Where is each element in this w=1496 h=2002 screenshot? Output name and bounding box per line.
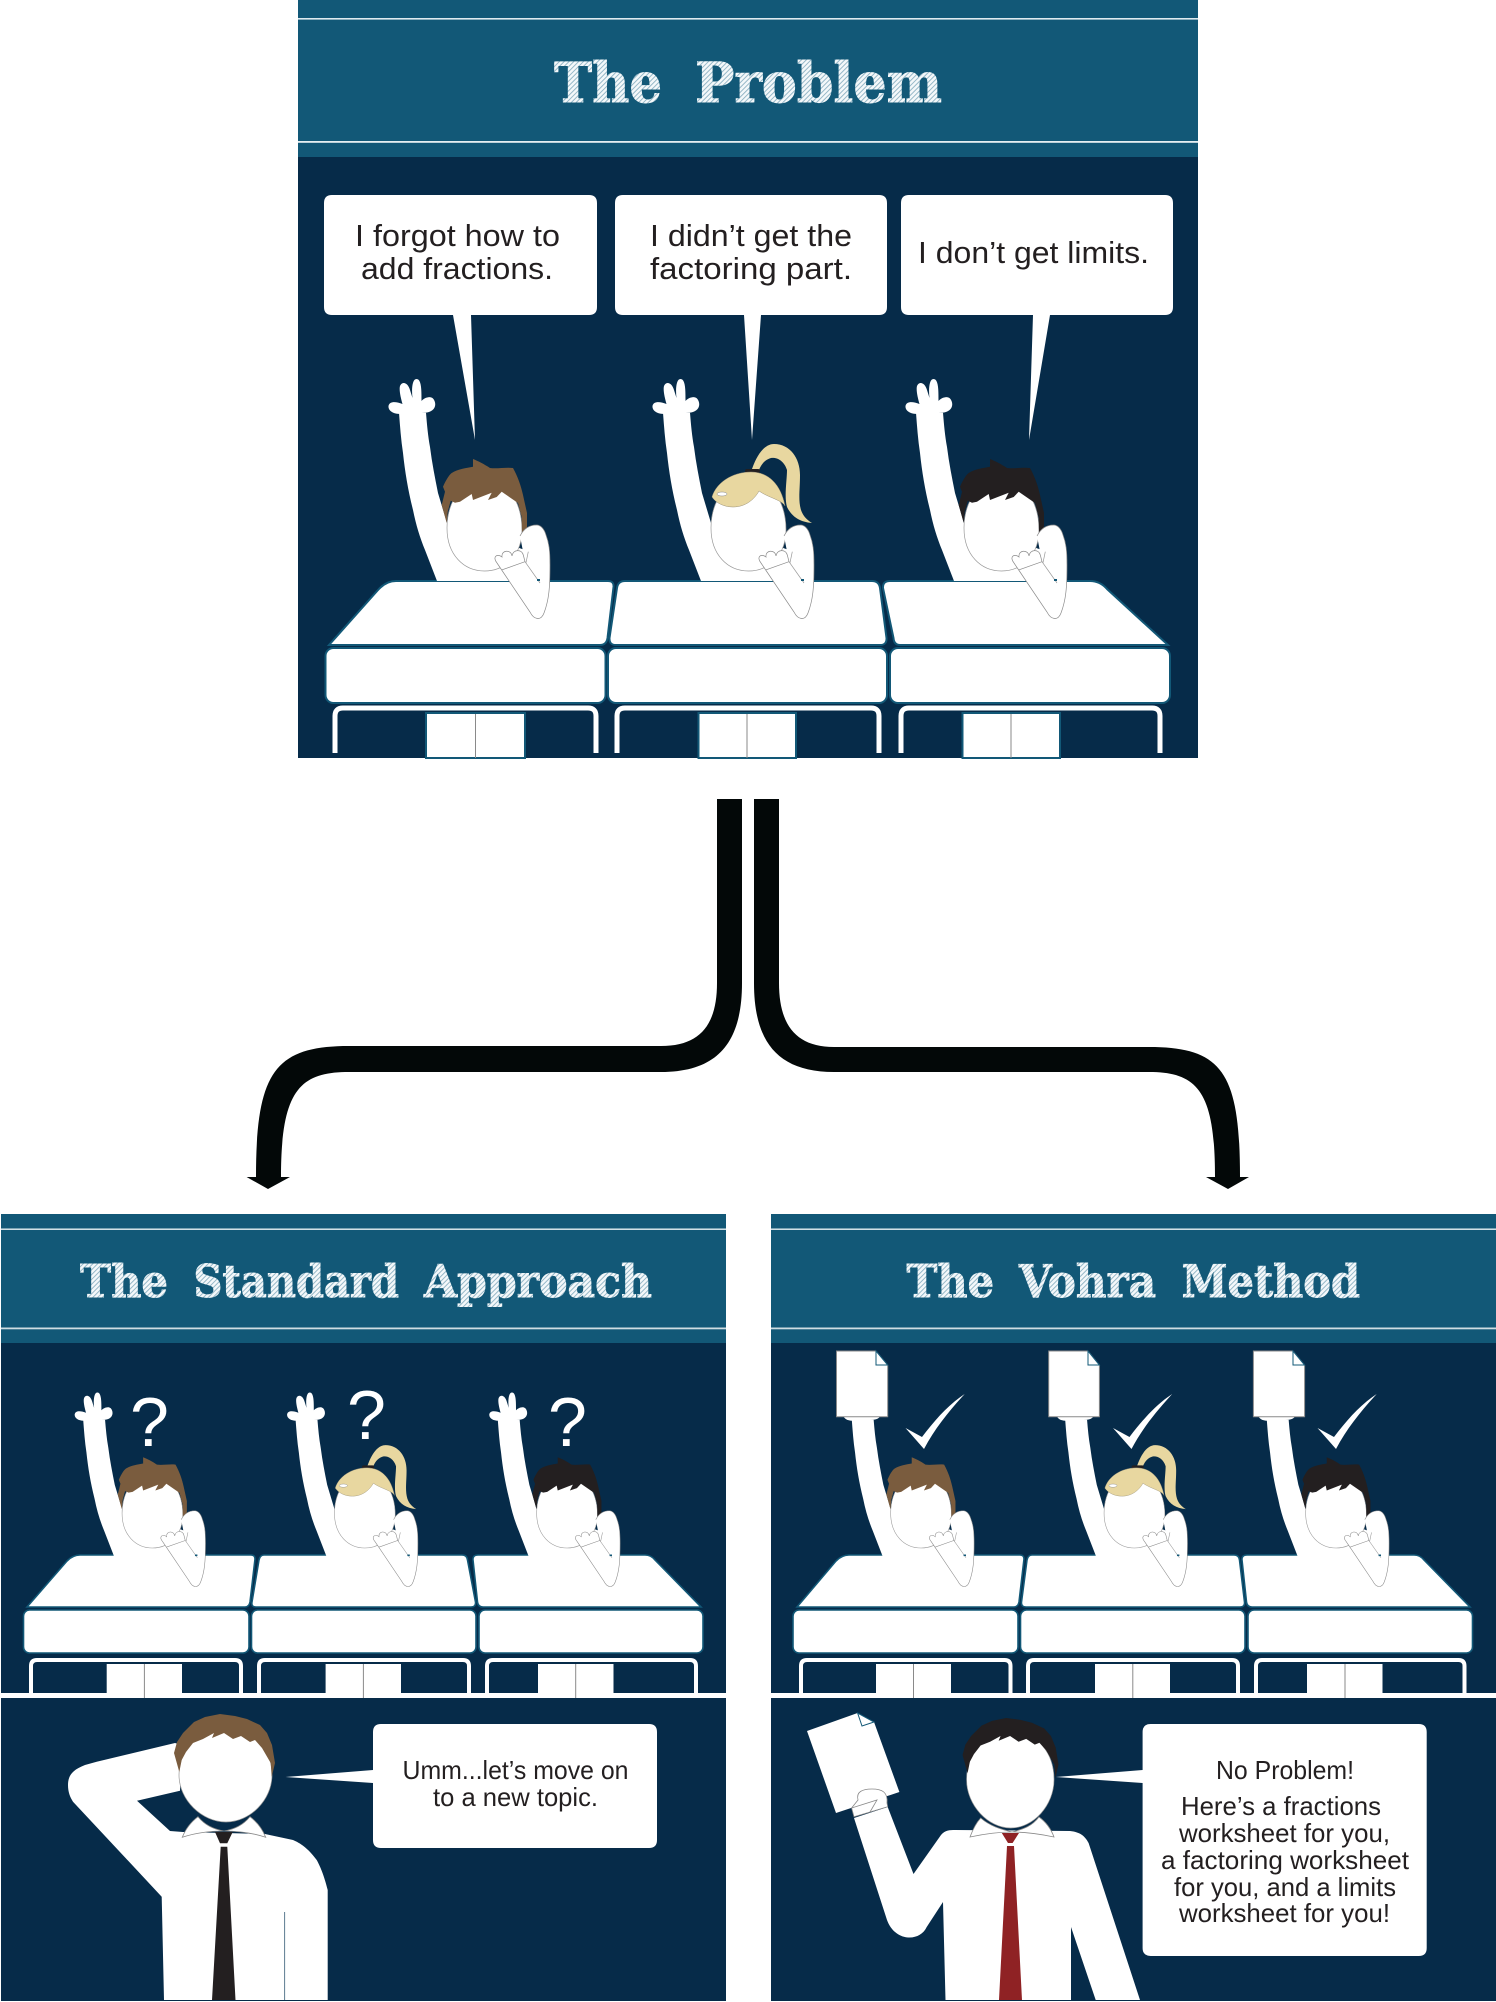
teacher: scratching head [68,1714,328,2000]
student: blonde ponytail [652,379,814,619]
speech bubble: fractions [324,195,597,440]
student: black hair [1258,1392,1389,1587]
classroom background [298,157,1198,758]
speech bubble: no problem: worksheet for you, [1178,1818,1390,1848]
teacher scene background [771,1698,1496,2001]
speech bubble: move on: Umm...let’s move on [402,1755,628,1785]
desks and chairs row [326,581,1170,758]
worksheet 3 [1253,1351,1305,1417]
student: black hair [905,379,1067,619]
title: The Vohra Method: The [906,1255,994,1308]
title: The Problem: The [554,50,662,115]
teacher scene background [1,1698,726,2001]
speech bubble: factoring: factoring part. [650,251,852,286]
worksheet 1 [836,1351,888,1417]
student: black hair [489,1392,620,1587]
title: The Problem [554,50,942,115]
panel: the vohra method [771,1214,1496,2001]
question mark 2: ? [347,1376,386,1454]
speech bubble: no problem: a factoring worksheet [1161,1845,1410,1875]
worksheet 2 [1049,1351,1099,1417]
student: brown hair [75,1392,206,1587]
speech bubble: no problem [1056,1724,1427,1956]
speech bubble: factoring [615,195,887,440]
check mark 1 [906,1394,965,1449]
arrow: to vohra method [754,799,1249,1189]
speech bubble: fractions: add fractions. [361,251,553,286]
desks and chairs row [24,1555,703,1698]
speech bubble: move on [286,1724,657,1848]
classroom background [1,1343,726,1693]
panel: the standard approach [1,1214,726,2001]
question mark 3: ? [548,1383,587,1461]
header band: standard approach [1,1214,726,1343]
student: brown hair [388,379,550,619]
check mark 2 [1113,1394,1172,1449]
speech bubble: move on: to a new topic. [433,1782,598,1812]
desks and chairs row [793,1555,1472,1698]
panel: the problem [298,0,1198,758]
title: The Standard Approach: Standard [194,1255,399,1308]
question mark 1: ? [130,1383,169,1461]
title: The Vohra Method: Vohra [1018,1255,1156,1308]
title: The Standard Approach: Approach [423,1255,652,1308]
student: blonde ponytail [287,1392,418,1587]
speech bubble: fractions: I forgot how to [355,218,560,253]
title: The Standard Approach [80,1255,652,1308]
check mark 3 [1318,1394,1377,1449]
arrow: to standard approach [247,799,742,1189]
header band: vohra method [771,1214,1496,1343]
student: brown hair [843,1392,974,1587]
speech bubble: factoring: I didn’t get the [650,218,852,253]
speech bubble: no problem: Here’s a fractions [1181,1791,1381,1821]
title: The Vohra Method [906,1255,1360,1308]
speech bubble: no problem: worksheet for you! [1178,1898,1390,1928]
speech bubble: no problem: for you, and a limits [1174,1872,1396,1902]
title: The Problem: Problem [695,50,942,115]
speech bubble: limits: I don’t get limits. [918,235,1149,270]
student: blonde ponytail [1057,1392,1188,1587]
title: The Vohra Method: Method [1182,1255,1360,1308]
title: The Standard Approach: The [80,1255,168,1308]
speech bubble: no problem: No Problem! [1216,1755,1354,1785]
speech bubble: limits [901,195,1173,440]
teacher: holding worksheet [807,1713,1140,2000]
header band: the problem [298,0,1198,157]
classroom background [771,1343,1496,1693]
